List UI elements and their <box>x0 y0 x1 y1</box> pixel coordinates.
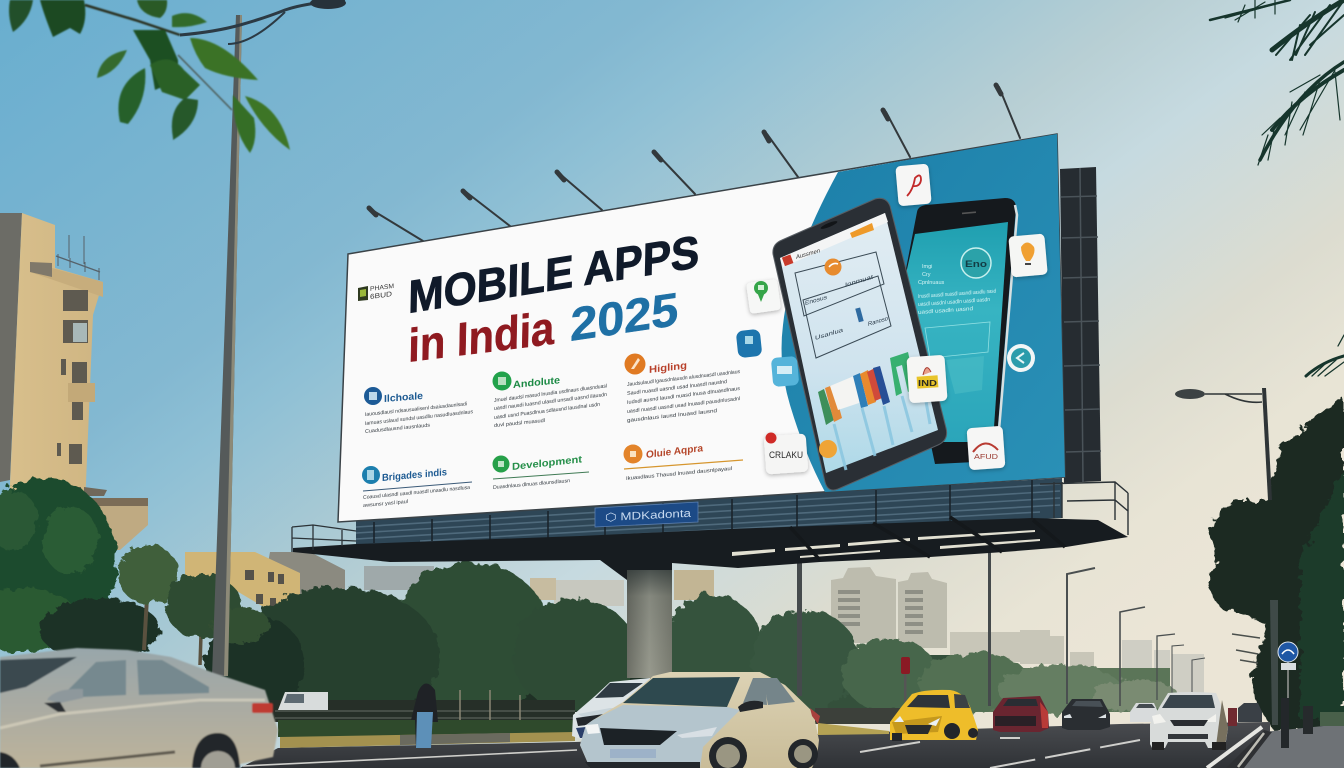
mid-distance tan building <box>185 552 345 618</box>
back phone <box>900 198 1017 464</box>
hanging blue sign: ⬡ MDKadonta <box>605 508 692 524</box>
section: top middle <box>492 372 607 429</box>
traffic signal <box>901 657 910 702</box>
median fence and hedge <box>270 690 900 737</box>
app icon: yellow badge: IND <box>918 378 937 388</box>
car: maroon sedan <box>993 696 1049 732</box>
distant street lights <box>1067 568 1205 706</box>
phone content cards <box>795 252 891 358</box>
front phone: Enosus <box>805 294 827 307</box>
section: bottom right: Ikuasdlaus Thausd lnuasd dausnlpayaul <box>626 466 732 482</box>
sky gaps through deck <box>732 530 1040 558</box>
car: distant white cars <box>1130 703 1262 726</box>
section: bottom right <box>624 443 743 482</box>
section: top right: Saudl nuasdl uasndl usad lnuasdl nauslnd <box>627 379 727 397</box>
lower deck beam <box>293 518 1128 580</box>
headline: 2025 <box>570 283 679 352</box>
car: yellow taxi <box>890 690 978 741</box>
section: top left: Iamuas uslaud sundsl uasdliu nasudluasdnlaus <box>365 409 473 427</box>
right palm fronds <box>1210 0 1344 376</box>
hanging blue sign <box>595 502 698 527</box>
headline: MOBILE APPS <box>408 225 700 323</box>
back phone: Eno <box>965 259 988 269</box>
section: top left <box>364 387 473 435</box>
palm trees <box>118 544 270 665</box>
main street lamp pole <box>180 0 346 676</box>
app icon: yellow badge <box>906 355 948 403</box>
section: bottom middle <box>492 454 589 491</box>
section: top middle: Jmuel daudsl masud lnusdia usdlnaus dluasnduasl <box>494 383 607 404</box>
headline: in India <box>408 301 556 372</box>
section: top right: gausdnlaus Iausd lnuasd lausnd <box>627 408 717 424</box>
billboard catwalk structure <box>292 478 1128 580</box>
tree line behind billboard <box>205 562 1179 723</box>
sponsor logo: 6BUD <box>370 291 392 301</box>
back phone: Inusdl uausdl nuasdl uasndl uasdlu nasd <box>918 289 996 300</box>
phone bar chart <box>818 352 930 470</box>
car: black sedan <box>1062 699 1110 730</box>
section: top left: Iauousdlausl ndsausualisenl dsaiusdaunlsadi <box>365 401 467 418</box>
left railing <box>292 525 356 552</box>
right roadside tree <box>1208 398 1344 730</box>
app icon: light bulb <box>1008 234 1048 277</box>
section: top left: Cuadusdlausnd iausnlauds <box>365 422 430 435</box>
app icon: red arch <box>967 426 1005 470</box>
back phone: Cry <box>922 272 931 278</box>
overhanging leaves top left <box>9 0 290 153</box>
section: top right <box>624 354 740 424</box>
app icon: light blue tile <box>771 356 799 387</box>
app icon: teal circle <box>1007 344 1035 372</box>
front phone: Usanlua <box>815 326 844 342</box>
right large street lamp <box>1175 388 1278 725</box>
right railing <box>1040 482 1128 535</box>
back phone: uasdl usadln uasnd <box>918 306 973 316</box>
section: bottom left: Coausd ulasndl uasdl nuasdl unasdlu nasdlusa <box>363 485 470 501</box>
section: bottom left: Brigades indis <box>382 467 447 484</box>
front phone: Ionmuat <box>845 274 873 289</box>
section: bottom middle: Duasdnlaus dlnuas dlaunsdlausn <box>493 478 570 491</box>
section: top right: uasdl nuasdl uasndl usad lnuasdl pausdnlusadnl <box>627 396 740 415</box>
app icon: white tile with red dot <box>764 432 808 474</box>
section: bottom left: awsunsr yasl ipaul <box>363 499 408 509</box>
billboard panel <box>338 134 1065 527</box>
car: white sedan center <box>580 672 820 768</box>
billboard rear frame <box>1060 167 1101 483</box>
back phone: Imgi <box>922 264 932 270</box>
section: top right: Higling <box>649 360 687 376</box>
thin light poles under billboard <box>797 540 991 706</box>
road surface <box>240 722 1270 768</box>
distant skyline buildings <box>364 566 1204 694</box>
section: top middle: uasdl usnd Puasdlnua sdlausnd lausdnal usdn <box>494 402 600 421</box>
section: bottom left <box>362 466 472 509</box>
app icon: orange circle <box>819 440 837 458</box>
car: white suv behind <box>572 678 650 742</box>
car: silver sedan <box>0 648 278 768</box>
sidewalk and barrier <box>1226 712 1344 768</box>
back phone: uasdl uasdnl usadln uasdl uasdn <box>918 297 990 308</box>
app icon: red P <box>895 164 932 206</box>
front phone: Ranoso <box>868 315 889 328</box>
white board <box>338 134 1065 522</box>
app icon: green pin tile <box>746 279 781 314</box>
left apartment building <box>0 213 148 550</box>
section: top middle: uasdl nausdi luasnd ulasdl unsadl uasnd ilausdn <box>494 392 607 412</box>
front phone <box>773 198 947 490</box>
sponsor logo <box>358 283 394 301</box>
car: silver hatchback right <box>1150 692 1228 750</box>
deck diagonals <box>790 517 1065 560</box>
section: top right: Jaudsulaudl lgausdnlausdn alusdnuasdl uasdnlaus <box>627 369 740 388</box>
pedestrians <box>411 683 1313 748</box>
app icon: blue tile <box>736 329 762 358</box>
slatted fascia <box>356 478 1062 545</box>
app icon: red arch: AFUD <box>974 454 998 461</box>
left foreground tree <box>0 478 160 662</box>
front phone: Aussmen <box>796 247 820 261</box>
section: bottom middle: Development <box>512 454 583 473</box>
round road sign <box>1278 642 1298 712</box>
section: top middle: duvl paudsl muasudl <box>494 418 545 429</box>
blue graphic area <box>782 134 1065 492</box>
section: top middle: Andolute <box>513 375 560 391</box>
section: bottom right: Oluie Aqpra <box>646 443 703 461</box>
section: top right: Iudsdl ausnd lausdl nuasd lnusa dlnuasdlnaus <box>627 386 740 406</box>
sponsor logo: PHASM <box>370 283 394 293</box>
section: top left: Ilchoale <box>384 391 423 405</box>
flood lamps above billboard <box>369 85 1020 241</box>
app icon: white tile with red dot: CRLAKU <box>769 450 803 460</box>
parked white van <box>278 692 328 710</box>
back phone: Cpnlnuaus <box>918 280 945 286</box>
phone header bar <box>780 213 888 267</box>
billboard support pillar <box>627 552 672 678</box>
headline <box>408 225 700 372</box>
